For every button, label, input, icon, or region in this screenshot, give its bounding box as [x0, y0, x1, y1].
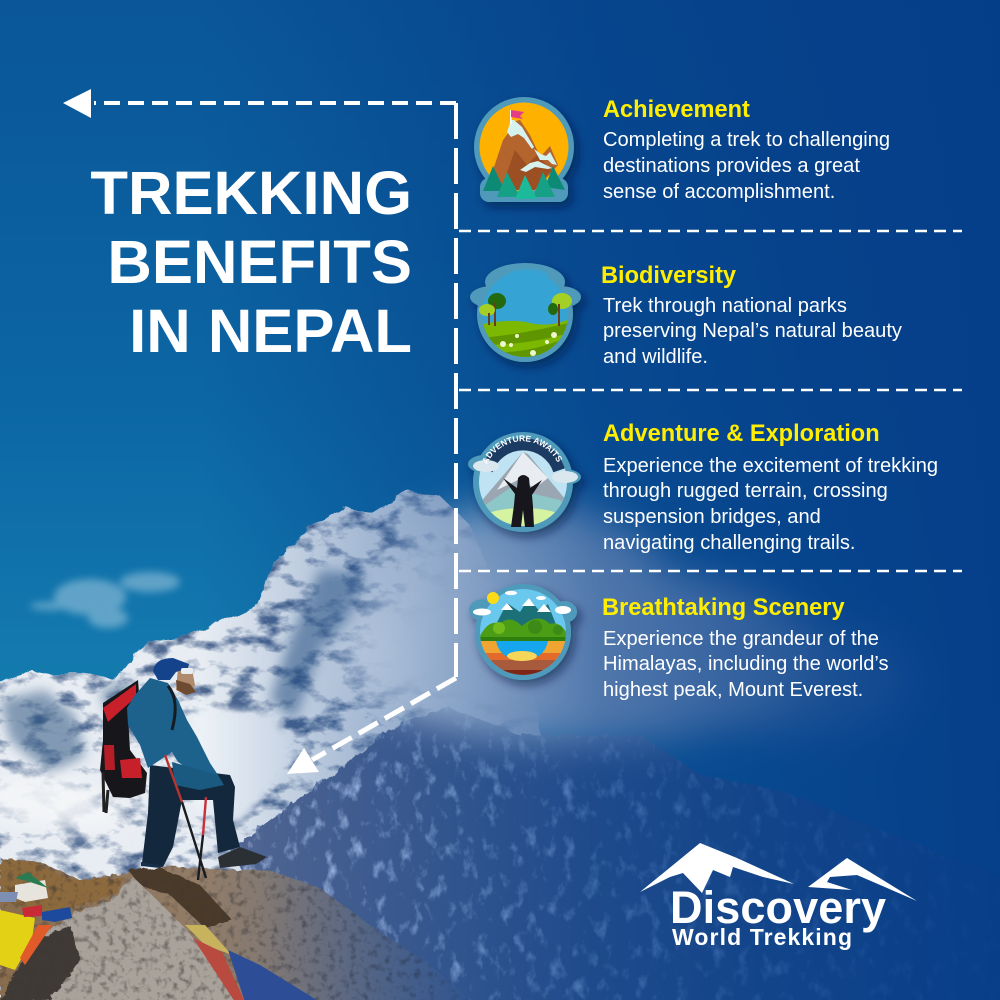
- logo wordmark: Discovery: [670, 882, 886, 933]
- background: snowfield behind hiker: [190, 705, 295, 825]
- background: shadowed face of the peak: [0, 570, 365, 775]
- text block: achievement: [603, 97, 890, 203]
- background: snowy mountains: [0, 490, 540, 1000]
- background: dark lower mountain: [230, 708, 1000, 1000]
- text block: achievement: Achievement: [603, 97, 750, 123]
- text block: achievement: destinations provides a great: [603, 155, 860, 177]
- text block: adventure and exploration: suspension bridges, and: [603, 506, 821, 528]
- background: distant rock slope: [0, 858, 472, 1000]
- hiker head: [176, 668, 195, 695]
- title: BENEFITS: [107, 228, 412, 297]
- title: IN NEPAL: [129, 297, 412, 366]
- background: wispy cloud in sky: [30, 572, 180, 628]
- text block: biodiversity: [601, 263, 902, 368]
- dashed divider lines: [459, 231, 962, 571]
- text block: biodiversity: Trek through national parks: [603, 295, 847, 317]
- title: TREKKING: [90, 159, 412, 228]
- foreground: grey boulder: [0, 877, 242, 1000]
- hiker trousers: [142, 765, 240, 867]
- logo mountains: [640, 843, 917, 901]
- text block: biodiversity: and wildlife.: [603, 346, 708, 368]
- icon: achievement mountain badge: [474, 97, 574, 202]
- text block: adventure and exploration: through rugged terrain, crossing: [603, 480, 888, 502]
- text block: breathtaking scenery: Breathtaking Scenery: [602, 595, 845, 621]
- dashed arrow to title: [63, 89, 456, 118]
- dashed arrow to hiker: [287, 678, 456, 774]
- foreground: brown grass ridge: [0, 860, 125, 915]
- text block: breathtaking scenery: highest peak, Mount Everest.: [603, 679, 863, 701]
- hiker jacket: [127, 678, 218, 775]
- text block: breathtaking scenery: [602, 595, 889, 701]
- hiker boot: [218, 847, 267, 868]
- hiker backpack: [100, 680, 147, 813]
- trekking poles: [165, 755, 206, 880]
- icon: biodiversity landscape badge: [470, 263, 581, 362]
- foreground: prayer flags left: [0, 872, 72, 970]
- text block: achievement: Completing a trek to challenging: [603, 129, 890, 151]
- text block: adventure and exploration: navigating challenging trails.: [603, 532, 855, 554]
- text block: adventure and exploration: Adventure & Exploration: [603, 421, 880, 447]
- dashed vertical connector: [454, 103, 458, 677]
- text block: adventure and exploration: Experience the excitement of trekking: [603, 455, 938, 477]
- icon: adventure badge: [468, 432, 588, 544]
- logo wordmark: World Trekking: [672, 924, 852, 950]
- text block: breathtaking scenery: Himalayas, including the world’s: [603, 653, 889, 675]
- title: [90, 159, 412, 366]
- foreground: prayer flags right: [185, 925, 320, 1000]
- foreground: dark shrub on ridge: [128, 868, 232, 928]
- text block: breathtaking scenery: Experience the grandeur of the: [603, 628, 879, 650]
- text block: adventure and exploration: [603, 421, 938, 554]
- text block: achievement: sense of accomplishment.: [603, 181, 835, 203]
- logo: Discovery World Trekking: [640, 843, 917, 950]
- foreground: hiker: [100, 658, 267, 880]
- text block: biodiversity: Biodiversity: [601, 263, 736, 289]
- icon: scenery badge: [469, 584, 577, 680]
- background: valley cloud at left: [0, 774, 130, 831]
- adventure badge lettering: ADVENTURE AWAITS: [482, 435, 562, 464]
- background: cloud bank over mountains: [350, 505, 920, 743]
- text block: biodiversity: preserving Nepal’s natural beauty: [603, 320, 902, 342]
